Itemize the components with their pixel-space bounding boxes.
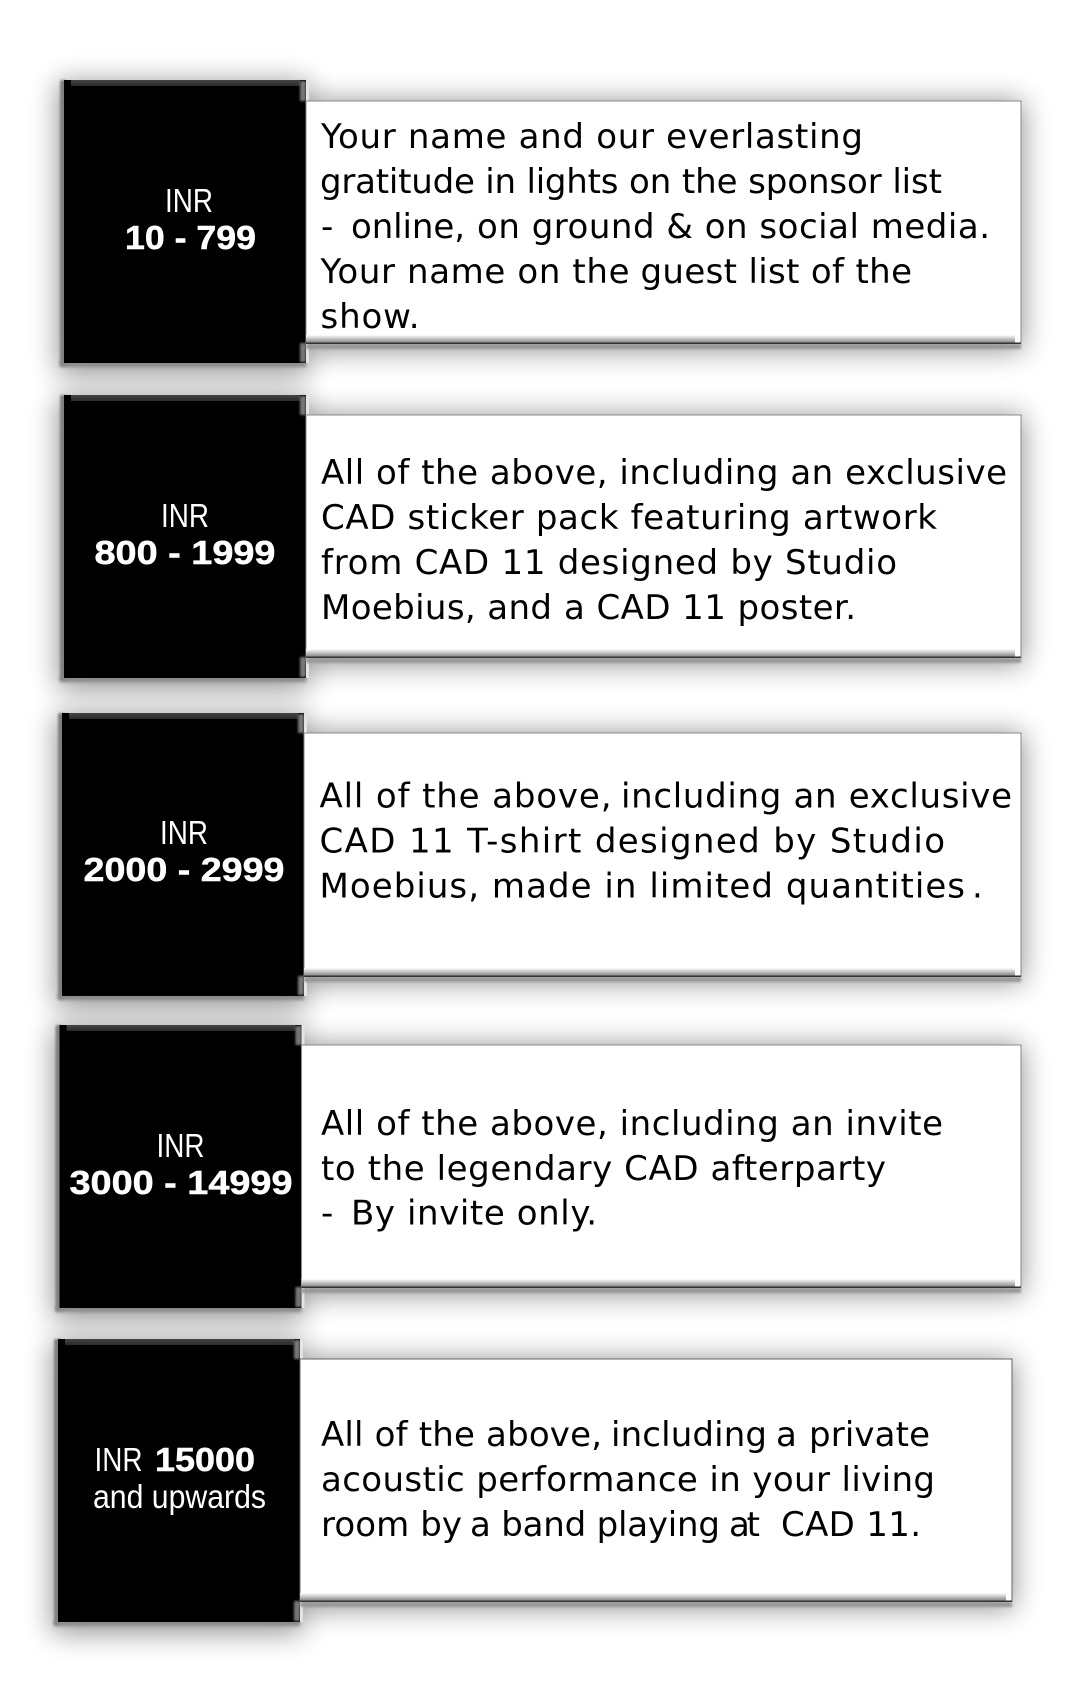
price block: INR 15000 and upwards: INR (94, 1441, 142, 1478)
description box: INR 10 - 799: guest list of the (640, 252, 912, 292)
description box: INR 2000 - 2999: . (972, 866, 983, 906)
panel: tier INR 2000 - 2999 (56, 713, 1023, 1007)
description box: INR 800 - 1999: a CAD 11 poster. (564, 588, 856, 628)
panel: tier INR 800 - 1999 (58, 395, 1023, 689)
description box: INR 2000 - 2999: All of the above, (320, 776, 612, 816)
panel: tier INR 3000 - 14999 (54, 1025, 1022, 1319)
description box: INR 15000 and upwards (300, 1359, 1012, 1607)
description box: INR 800 - 1999 (306, 415, 1021, 663)
description box: INR 10 - 799: gratitude in lights (320, 162, 618, 202)
description box: INR 10 - 799: - (321, 207, 333, 247)
description box: INR 15000 and upwards: acoustic performance in your living (321, 1460, 935, 1500)
price block: INR 2000 - 2999 (56, 713, 1023, 1007)
price block: INR 10 - 799: INR (165, 182, 213, 219)
description box: INR 15000 and upwards: room by (321, 1505, 462, 1545)
description box: INR 3000 - 14999 (302, 1045, 1021, 1293)
description box: INR 15000 and upwards: CAD 11. (781, 1505, 921, 1545)
description box: INR 800 - 1999: Moebius, and (321, 588, 552, 628)
description box: INR 3000 - 14999: All of the above, including an invite (321, 1104, 943, 1144)
price block: INR 3000 - 14999: INR (156, 1127, 204, 1164)
description box: INR 3000 - 14999: to the legendary CAD afterparty (321, 1149, 886, 1189)
description box: INR 2000 - 2999: including an exclusive (621, 776, 1012, 816)
price block: INR 15000 and upwards: and upwards (93, 1478, 266, 1515)
price block: INR 800 - 1999: 800 - 1999 (94, 534, 276, 571)
description box: INR 3000 - 14999: By invite only. (351, 1194, 597, 1234)
price block: INR 3000 - 14999: 3000 - 14999 (70, 1164, 292, 1201)
price block: INR 3000 - 14999 (54, 1025, 1022, 1319)
price block: INR 2000 - 2999: INR (160, 814, 208, 851)
description box: INR 10 - 799: Your name on the (320, 252, 630, 292)
price block: INR 10 - 799: 10 - 799 (125, 219, 256, 256)
description box: INR 15000 and upwards: a (776, 1415, 797, 1455)
description box: INR 800 - 1999: from CAD 11 designed by Studio (321, 543, 897, 583)
price block: INR 15000 and upwards (52, 1339, 1014, 1633)
description box: INR 15000 and upwards: private (809, 1415, 930, 1455)
description box: INR 2000 - 2999: CAD 11 T-shirt designed by Studio (320, 822, 945, 862)
description box: INR 10 - 799: on ground & on social media. (477, 207, 990, 247)
panel: tier INR 15000 and upwards (52, 1339, 1014, 1633)
description box: INR 10 - 799: show. (320, 297, 420, 337)
description box: INR 800 - 1999: CAD sticker pack featuring artwork (321, 498, 937, 538)
description box: INR 15000 and upwards: a band playing (470, 1505, 720, 1545)
price block: INR 800 - 1999 (58, 395, 1023, 689)
description box: INR 3000 - 14999: - (321, 1194, 333, 1234)
price block: INR 800 - 1999: INR (161, 497, 209, 534)
description box: INR 15000 and upwards: including (611, 1415, 767, 1455)
description box: INR 10 - 799: online, (351, 207, 465, 247)
description box: INR 2000 - 2999: Moebius, made in limited quantities (320, 866, 965, 906)
description box: INR 10 - 799: on the sponsor list (629, 162, 942, 202)
panel: tier INR 10 - 799 (58, 80, 1023, 374)
description box: INR 800 - 1999: All of the above, including an exclusive (321, 453, 1007, 493)
price block: INR 2000 - 2999: 2000 - 2999 (84, 851, 284, 888)
description box: INR 15000 and upwards: All of the above, (321, 1415, 602, 1455)
description box: INR 10 - 799: Your name and our everlasting (320, 117, 863, 157)
price block: INR 10 - 799 (58, 80, 1023, 374)
description box: INR 15000 and upwards: at (729, 1505, 760, 1545)
price block: INR 15000 and upwards: 15000 (155, 1441, 255, 1478)
description box: INR 10 - 799 (306, 101, 1021, 349)
description box: INR 2000 - 2999 (304, 733, 1021, 982)
